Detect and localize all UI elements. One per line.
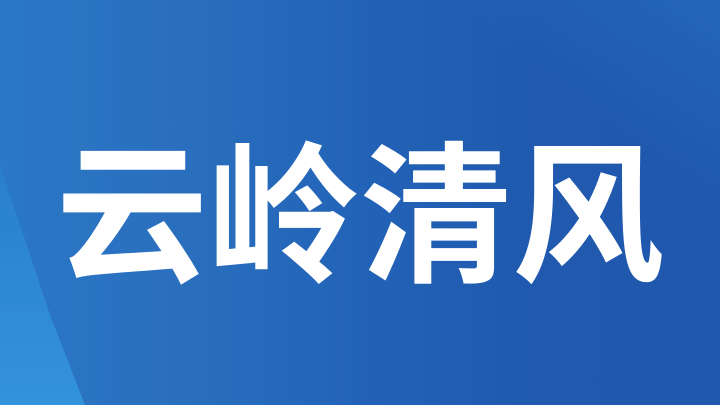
title: 云岭清风 — [56, 133, 664, 303]
